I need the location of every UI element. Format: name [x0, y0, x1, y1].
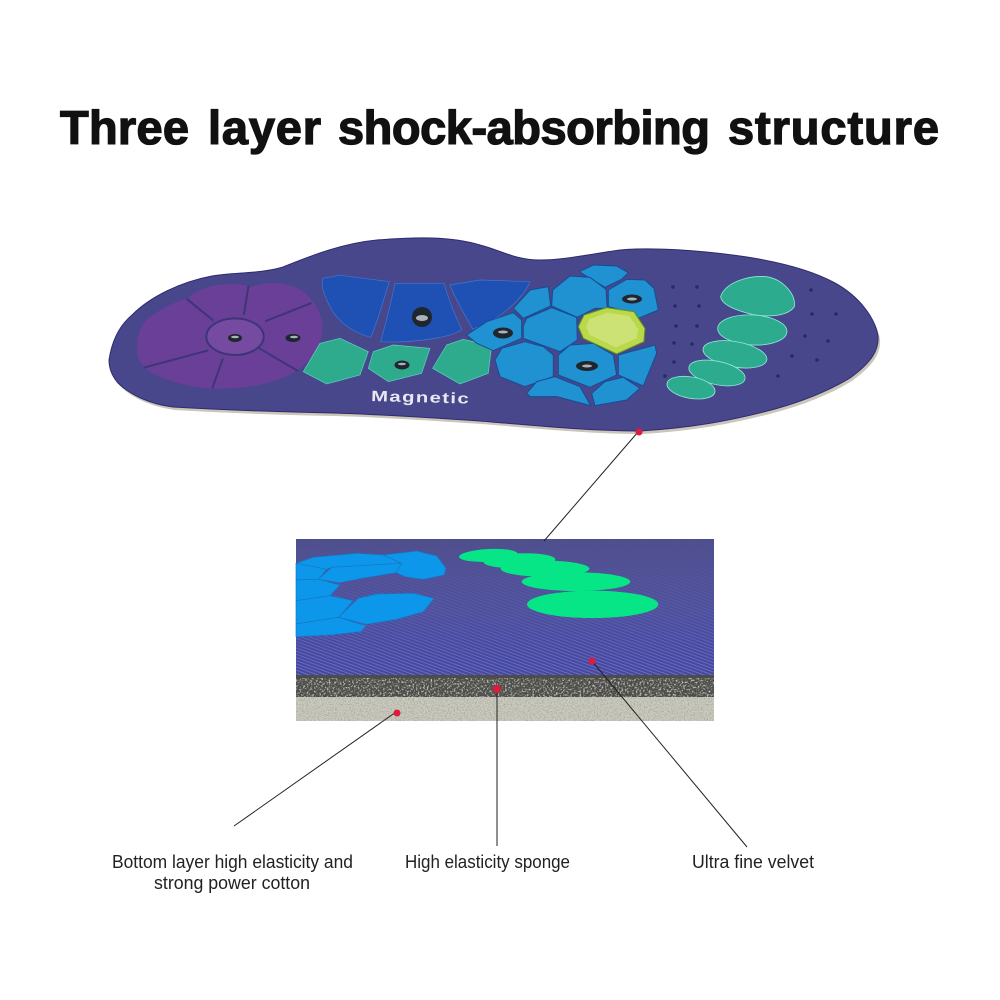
- insole photo: [109, 238, 880, 434]
- label: bottom layer: [112, 852, 353, 893]
- title: Three: [60, 101, 189, 154]
- cotton grain: [296, 697, 714, 721]
- heel purple pads: [137, 283, 323, 389]
- close-up material photo: [296, 539, 714, 721]
- leader line: bottom layer: [234, 712, 396, 826]
- velvet shading: [296, 539, 714, 676]
- green pads close-up: [459, 547, 658, 618]
- cotton layer: [296, 697, 714, 721]
- leader line: sponge: [496, 688, 498, 846]
- blue forefoot pads: [467, 265, 658, 406]
- leader line: insole to close-up: [544, 432, 638, 541]
- yellow gel hexagon: [578, 308, 645, 354]
- printed word on insole: Magnetic: [371, 388, 470, 408]
- label: bottom layer: Bottom layer high elasticity and: [112, 852, 353, 872]
- blue pads close-up: [296, 551, 446, 637]
- title: shock-absorbing: [338, 101, 710, 154]
- insole body: [109, 238, 878, 431]
- vent holes: [663, 285, 838, 378]
- green arch pads: [303, 338, 492, 384]
- label: velvet: Ultra fine velvet: [692, 852, 814, 872]
- label: bottom layer: strong power cotton: [154, 873, 310, 893]
- marker dots: [394, 428, 642, 716]
- leader line: velvet: [592, 661, 747, 847]
- velvet layer: [296, 539, 714, 676]
- label: sponge: High elasticity sponge: [405, 852, 570, 872]
- sponge grain: [296, 678, 714, 697]
- magnet highlights: [231, 298, 637, 368]
- title: layer: [208, 101, 321, 154]
- title: structure: [728, 101, 939, 154]
- sponge layer: [296, 675, 714, 697]
- insole bottom rim: [111, 241, 880, 434]
- magnets: [228, 294, 642, 371]
- arch dark blue pads: [322, 275, 530, 342]
- toe green pads: [665, 276, 795, 402]
